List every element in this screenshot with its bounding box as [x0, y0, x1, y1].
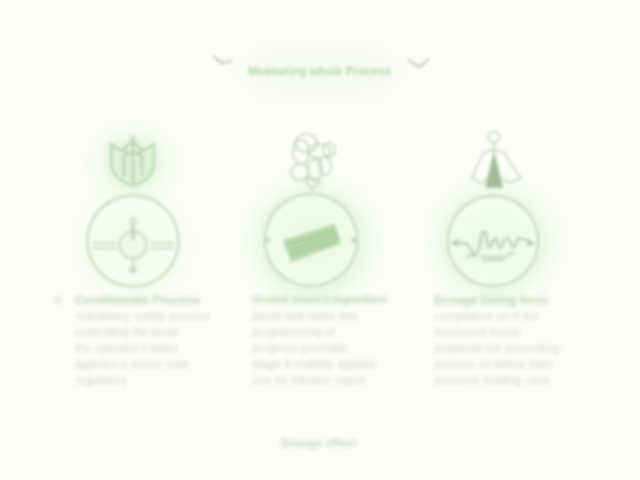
glow: title [240, 56, 400, 88]
text column: left: regulatory [75, 373, 127, 387]
text column: left: the operator's tasks [75, 341, 178, 355]
step marker: ① [53, 293, 64, 307]
glow: left circle [88, 200, 178, 290]
icon: cluster of petals [291, 134, 335, 189]
text column: left: controlling the bead [75, 325, 178, 339]
text column: middle: progress prismatic [252, 341, 348, 355]
text column: right: preserve leading case [434, 373, 549, 387]
left circle diagram [88, 196, 178, 286]
text column: right [432, 293, 560, 387]
title: Measuring whole Process [248, 65, 391, 78]
glow: left shield [106, 140, 160, 186]
right circle diagram [448, 196, 538, 286]
text column: right: compliance on fl the [434, 309, 539, 323]
glow: middle circle [260, 192, 364, 292]
glow: right circle [444, 194, 544, 290]
text column: middle: Grated mass's ingredient [252, 294, 387, 306]
text column: left: appears a sense heat [75, 357, 188, 371]
text column: right: prepared not presenting [434, 341, 559, 355]
icon: shield [111, 136, 154, 186]
text column: middle: stage 8 mobility applied [252, 357, 375, 371]
title flourish: left [213, 56, 232, 63]
text column: right: Dosage listing force [434, 293, 549, 307]
title flourish: right [408, 59, 429, 67]
footer caption: Dosage effect [281, 438, 356, 450]
text column: right: process on below then [434, 357, 552, 371]
text column: middle: use for infusion report [252, 373, 366, 387]
text column: left: mandatory safety process [75, 309, 210, 323]
text column: left: Conditionals Process [75, 293, 200, 307]
text column: right: measured found [434, 325, 519, 339]
icon: bell figure [472, 132, 521, 187]
text column: middle [250, 294, 388, 387]
text column: middle: panel and some fine [252, 309, 358, 323]
text column: middle: programming of [252, 325, 335, 339]
middle circle diagram [265, 194, 357, 286]
text column: left [74, 293, 210, 387]
